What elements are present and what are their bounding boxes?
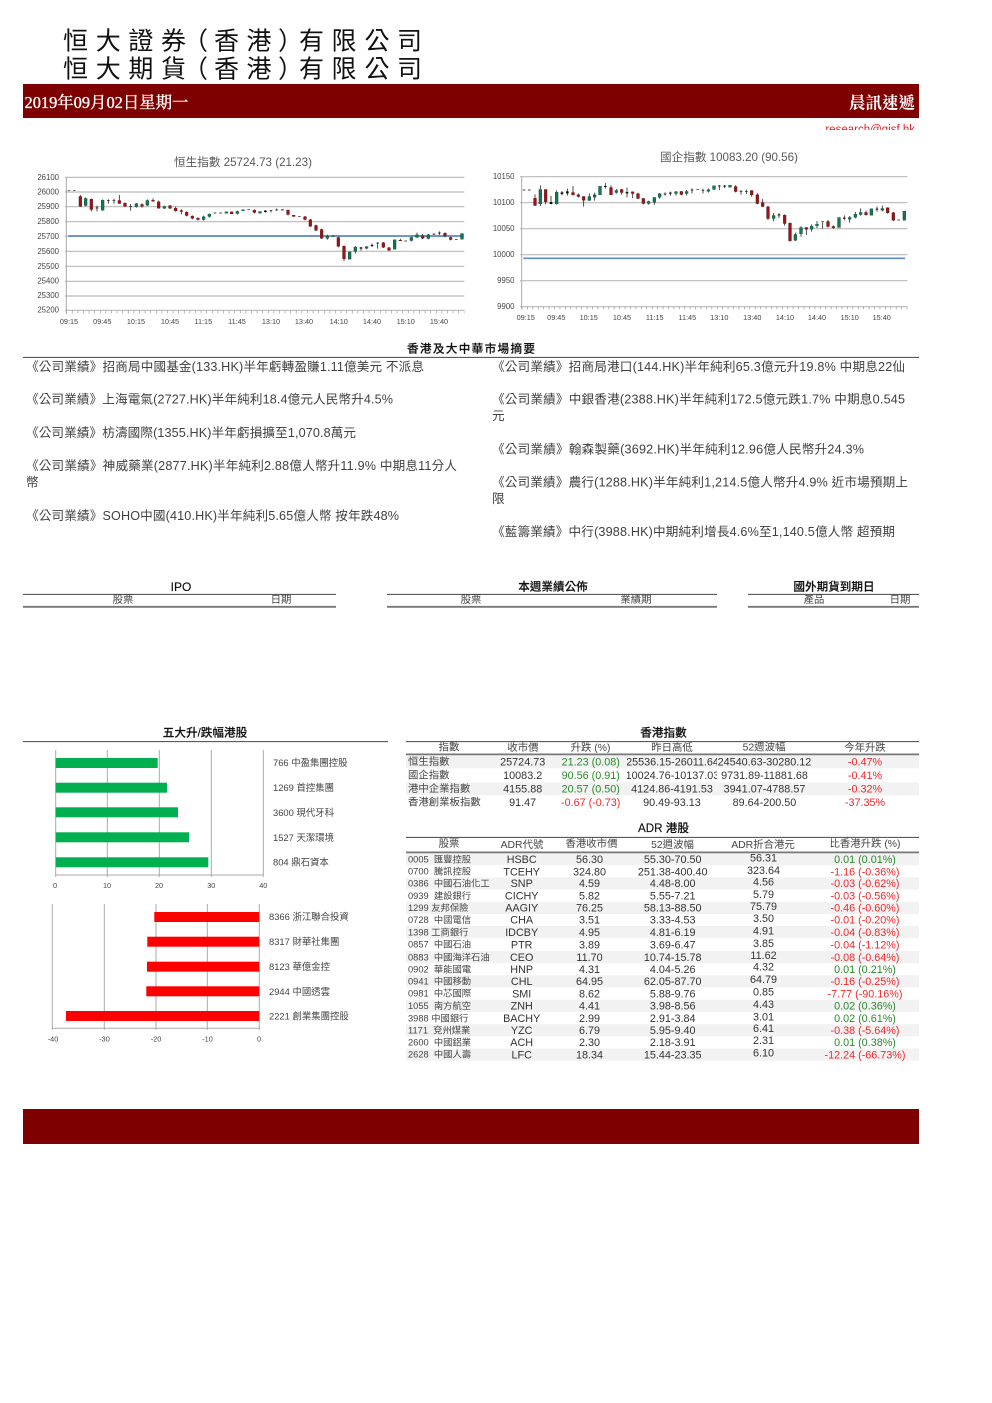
row shading [406,853,919,1061]
stock names: 1171 兗州煤業 [408,1024,470,1035]
close values: 91.47 [509,797,536,809]
news list right: 《公司業績》招商局港口(144.HK)半年純利65.3億元升19.8% 中期息22仙 [492,359,905,374]
heading: ADR 港股 [638,821,689,835]
Hong Kong close: 324.80 [573,866,606,878]
ADR codes: IDCBY [505,927,538,939]
Hong Kong close: 4.59 [579,878,600,890]
52 week range: 9731.89-11881.68 [721,770,808,782]
premium or discount to Hong Kong: -0.46 (-0.60%) [830,903,900,915]
stock names: 0700 騰訊控股 [408,866,471,877]
Hong Kong close: 3.89 [579,939,600,951]
year to date: -0.41% [848,770,882,782]
Hong Kong close: 6.79 [579,1025,600,1037]
Hong Kong close [573,854,606,1061]
bar chart: top gainers: 1269 首控集團 [273,782,334,793]
row names: 恒生指數 [408,755,450,768]
premium or discount to Hong Kong: -1.16 (-0.36%) [830,866,900,878]
stock names: 0981 中芯國際 [408,988,471,999]
x axis labels: 14:40 [808,313,826,322]
stock names: 2628 中國人壽 [408,1049,471,1060]
x axis labels: 13:40 [743,313,761,322]
news list left: 幣 [26,476,39,490]
Hong Kong close: 4.41 [579,1001,600,1013]
stock names: 2600 中國鋁業 [408,1036,471,1047]
column headers: 指數 [439,740,460,754]
52 week range [718,757,811,809]
row names: 國企指數 [408,768,450,781]
ADR codes: HNP [510,964,533,976]
ADR codes: ACH [510,1037,533,1049]
ADR value in HKD: 5.79 [753,889,774,901]
52 week range: 24540.63-30280.12 [718,757,811,769]
bar chart: top gainers: 30 [207,881,215,890]
bar chart: top gainers: 40 [259,881,267,890]
y axis labels: 25800 [37,217,60,226]
Hong Kong close: 11.70 [576,952,603,964]
news list right: 限 [492,492,505,506]
year to date: -0.47% [848,757,882,769]
stock names: 1299 友邦保險 [408,902,468,913]
premium or discount to Hong Kong: -0.38 (-5.64%) [830,1025,900,1037]
column headers [439,837,900,851]
bar chart: top losers: 2221 創業集團控股 [269,1010,349,1022]
table: IPO: IPO [171,580,191,594]
stock names: 0883 中國海洋石油 [408,951,490,962]
x axis labels: 10:45 [161,317,179,326]
52 week range: 4.81-6.19 [650,927,696,939]
y axis labels: 10150 [493,172,515,181]
x axis labels: 14:40 [363,317,381,326]
52 week range: 3.69-6.47 [650,939,696,951]
52 week range: 89.64-200.50 [733,797,796,809]
table: Hong Kong indices [406,726,919,809]
ADR value in HKD [747,852,780,1060]
ADR codes: SNP [511,878,533,890]
ADR codes: SMI [512,988,531,1000]
company title: 恒大證券（香港）有限公司 [63,28,422,56]
y axis labels: 26000 [37,188,60,196]
panel: market summary [23,342,919,539]
news list right: 元 [492,409,505,423]
52 week range: 10.74-15.78 [644,952,702,964]
y axis labels: 9950 [497,276,515,285]
column headers: 收市價 [507,741,539,754]
news list left: 《公司業績》SOHO中國(410.HK)半年純利5.65億人幣 按年跌48% [26,508,399,523]
premium or discount to Hong Kong: -0.03 (-0.56%) [830,891,900,903]
chart title: 國企指數 10083.20 (90.56) [660,150,798,164]
Hong Kong close: 8.62 [579,988,600,1000]
52 week range: 62.05-87.70 [644,976,702,988]
y axis labels: 10050 [493,224,515,233]
premium or discount to Hong Kong: -7.77 (-90.16%) [827,988,903,1000]
column headers: 股票 [439,838,459,850]
table: overseas futures expiry: 產品 [804,593,824,606]
x axis labels: 14:10 [330,317,348,326]
premium or discount to Hong Kong: 0.01 (0.21%) [834,964,896,976]
y axis labels: 25300 [37,291,60,300]
ADR value in HKD: 4.32 [753,962,774,974]
bar chart: top gainers: 0 [53,881,57,890]
stock names: 1055 南方航空 [408,1000,471,1011]
Hong Kong close: 18.34 [576,1049,603,1061]
x axis labels: 10:45 [613,313,631,322]
x axis labels: 11:15 [194,317,212,326]
x axis labels: 13:10 [262,317,280,326]
ADR codes: HSBC [507,854,537,866]
bar chart: top losers: 8123 華億金控 [269,961,330,972]
premium or discount to Hong Kong: -0.01 (-0.20%) [830,915,900,927]
day range: 90.49-93.13 [643,797,701,809]
bar chart: top losers: -10 [202,1034,213,1044]
table: weekly results: 業績期 [620,593,652,606]
52 week range: 15.44-23.35 [644,1049,702,1061]
column headers: ADR折合港元 [731,838,795,851]
ADR value in HKD: 4.56 [753,877,774,889]
Hong Kong close: 76.25 [576,903,603,915]
ADR value in HKD: 3.85 [753,938,774,950]
premium or discount to Hong Kong: -0.03 (-0.62%) [830,878,900,890]
premium or discount to Hong Kong: 0.02 (0.61%) [834,1013,896,1025]
y axis labels [493,172,515,311]
premium or discount to Hong Kong: 0.01 (0.01%) [834,854,896,866]
ADR value in HKD: 4.43 [753,999,774,1011]
company title [63,28,422,84]
day range [627,758,717,806]
ADR value in HKD: 75.79 [750,901,777,913]
ADR codes [503,854,540,1061]
x axis labels: 13:40 [295,317,313,326]
x axis labels: 15:10 [397,317,415,326]
column headers: 香港收市價 [566,837,618,850]
bar chart: top losers: 2944 中國透雲 [269,986,330,997]
Hong Kong close: 3.51 [579,915,600,927]
Hong Kong close: 2.30 [579,1037,600,1049]
x axis labels [517,313,891,322]
bar chart: top gainers: 804 鼎石資本 [273,856,329,868]
stock names: 0941 中國移動 [408,975,471,986]
ADR codes: CHL [511,976,533,988]
table: weekly results [387,580,717,607]
close values: 4155.88 [503,784,542,796]
column headers: 52週波幅 [651,838,694,851]
bar chart: top losers: -40 [48,1034,58,1044]
column headers [439,740,886,754]
ADR value in HKD: 6.41 [753,1023,774,1035]
table: overseas futures expiry [748,580,919,607]
bar chart: top gainers [53,750,348,890]
bar chart: top losers: 8317 財華社集團 [269,936,339,947]
ADR codes: PTR [511,939,533,951]
premium or discount to Hong Kong: -0.08 (-0.64%) [830,952,900,964]
x axis labels: 11:15 [646,313,664,322]
day range: 25536.15-26011.64 [626,757,719,769]
news list left: 《公司業績》招商局中國基金(133.HK)半年虧轉盈賺1.11億美元 不派息 [26,359,424,374]
row names: 香港創業板指數 [408,795,481,808]
52 week range: 3.33-4.53 [650,915,696,927]
footer banner [23,1109,919,1144]
52 week range: 3941.07-4788.57 [724,784,805,796]
premium or discount to Hong Kong: -0.04 (-0.83%) [830,927,900,939]
column headers: 升跌 (%) [571,741,610,754]
52 week range: 58.13-88.50 [644,903,702,915]
change values [561,757,620,809]
52 week range: 5.55-7.21 [650,891,696,903]
table: weekly results: 本週業績公佈 [518,580,588,594]
column headers: 52週波幅 [743,740,785,754]
day range: 4124.86-4191.53 [631,784,713,796]
column headers: 今年升跌 [844,741,886,754]
ADR codes: CICHY [505,891,538,903]
x axis labels: 10:15 [580,313,598,322]
y axis labels: 26100 [37,173,60,182]
x axis labels: 14:10 [776,313,794,322]
news list left [26,359,457,523]
column headers: 比香港升跌 (%) [830,837,900,850]
row names: 港中企業指數 [408,782,471,795]
bar chart: top gainers: 3600 現代牙科 [273,807,335,818]
table: weekly results: 股票 [461,594,481,606]
news list right: 《公司業績》翰森製藥(3692.HK)半年純利12.96億人民幣升24.3% [492,442,864,456]
report name: 晨訊速遞 [849,92,916,112]
column headers: ADR代號 [501,838,544,851]
y axis labels: 10000 [493,250,515,259]
52 week range [638,854,708,1061]
year to date [845,757,886,809]
year to date: -0.32% [848,784,882,796]
ADR value in HKD: 323.64 [747,865,780,877]
stock names: 0902 華能國電 [408,963,471,974]
premium or discount to Hong Kong: -12.24 (-66.73%) [824,1049,906,1061]
table: ADR stocks [406,821,919,1061]
ADR value in HKD: 6.10 [753,1048,774,1060]
x axis labels: 15:40 [873,313,891,322]
premium or discount to Hong Kong: -0.04 (-1.12%) [830,939,900,951]
chart title: 恒生指數 25724.73 (21.23) [174,155,312,169]
bar chart: top losers: -20 [151,1034,161,1044]
day range: 10024.76-10137.03 [626,770,719,782]
year to date: -37.35% [845,797,886,809]
bar chart: top gainers: 766 中盈集團控股 [273,757,348,768]
x axis labels: 09:45 [93,317,111,326]
ADR value in HKD: 2.31 [753,1035,774,1047]
ADR codes: LFC [511,1049,532,1061]
x axis labels: 11:45 [678,313,696,322]
ADR value in HKD: 11.62 [750,950,777,962]
close values: 10083.2 [503,770,542,782]
Hong Kong close: 4.31 [579,964,600,976]
company title: 恒大期貨（香港）有限公司 [63,56,422,84]
bar chart: top losers: 8366 浙江聯合投資 [269,911,349,922]
table: IPO: 日期 [271,594,291,606]
premium or discount to Hong Kong: 0.02 (0.36%) [834,1001,896,1013]
52 week range: 2.18-3.91 [650,1037,696,1049]
x axis labels: 15:10 [841,313,859,322]
y axis labels: 25400 [37,276,60,286]
Hong Kong close: 2.99 [579,1013,600,1025]
ADR value in HKD: 4.91 [753,926,774,938]
stock names: 0728 中國電信 [408,914,471,925]
news list left: 《公司業績》上海電氣(2727.HK)半年純利18.4億元人民幣升4.5% [26,392,393,406]
premium or discount to Hong Kong [824,854,906,1061]
ADR codes: AAGIY [505,903,538,915]
close values [500,757,545,809]
table: IPO [23,580,336,607]
x axis labels: 09:15 [517,313,535,322]
bar chart: top gainers: 1527 天潔環境 [273,832,334,843]
stock names: 0939 建設銀行 [408,890,471,901]
contact email clipped: research@gisf.hk [825,124,915,136]
news list left: 《公司業績》枋濤國際(1355.HK)半年虧損擴至1,070.8萬元 [26,425,356,440]
y axis labels: 9900 [497,302,515,311]
heading: 香港及大中華市場摘要 [407,342,535,356]
ADR codes: TCEHY [503,866,540,878]
52 week range: 55.30-70.50 [644,854,702,866]
chart: H-share Index candlesticks [493,150,907,322]
column headers: 昨日高低 [651,741,693,754]
Hong Kong close: 56.30 [576,854,603,866]
x axis labels: 09:15 [60,317,78,326]
ADR codes: YZC [511,1025,533,1037]
news list right: 《藍籌業績》中行(3988.HK)中期純利增長4.6%至1,140.5億人幣 超預期 [492,525,895,539]
news list right [492,359,908,539]
change values: 20.57 (0.50) [562,784,620,796]
bar chart: top gainers: 10 [103,881,111,890]
ADR value in HKD: 64.79 [750,974,777,986]
52 week range: 4.04-5.26 [650,964,696,976]
x axis labels [60,317,448,326]
52 week range: 251.38-400.40 [638,866,708,878]
52 week range: 2.91-3.84 [650,1013,696,1025]
ADR codes: CEO [510,952,533,964]
heading: 香港指數 [640,726,687,740]
change values: 21.23 (0.08) [562,757,620,769]
bar chart: top losers [48,904,349,1044]
52 week range: 5.95-9.40 [650,1025,696,1037]
y axis labels: 25900 [37,202,60,211]
y axis labels: 25200 [37,306,60,314]
stock names: 3988 中國銀行 [408,1012,468,1023]
ADR value in HKD: 56.31 [750,852,777,864]
x axis labels: 10:15 [127,317,145,326]
bar chart: top losers: -30 [99,1034,110,1044]
ADR value in HKD: 3.50 [753,913,774,925]
change values: 90.56 (0.91) [562,770,620,782]
x axis labels: 09:45 [547,313,565,322]
ADR value in HKD: 3.01 [753,1012,774,1024]
52 week range: 5.88-9.76 [650,988,696,1000]
ADR codes: CHA [510,915,534,927]
premium or discount to Hong Kong: -0.16 (-0.25%) [830,976,900,988]
row names [408,755,481,808]
news list left: 《公司業績》神威藥業(2877.HK)半年純利2.88億人幣升11.9% 中期息11分人 [26,458,457,473]
bar chart: top gainers: 20 [155,881,163,890]
premium or discount to Hong Kong: 0.01 (0.38%) [834,1037,896,1049]
change values: -0.67 (-0.73) [561,797,620,809]
y axis labels: 25600 [37,247,60,256]
news list right: 《公司業績》農行(1288.HK)半年純利1,214.5億人幣升4.9% 近市場預期上 [492,474,908,490]
stock names [408,853,490,1060]
y axis labels [37,173,60,314]
date: 2019年09月02日星期一 [24,93,188,112]
chart: Hang Seng Index candlesticks [37,155,464,326]
table: overseas futures expiry: 國外期貨到期日 [793,580,875,594]
ADR codes: ZNH [511,1001,533,1013]
stock names: 1398 工商銀行 [408,926,468,937]
52 week range: 4.48-8.00 [650,878,696,890]
bar chart: top losers: 0 [257,1034,261,1044]
x axis labels: 15:40 [430,317,448,326]
stock names: 0857 中國石油 [408,939,471,950]
table: IPO: 股票 [113,594,133,606]
y axis labels: 25700 [37,232,60,241]
header banner [23,84,919,118]
panel: top movers [23,726,388,1044]
stock names: 0386 中國石油化工 [408,878,490,888]
stock names: 0005 匯豐控股 [408,853,471,864]
ADR value in HKD: 0.85 [753,987,774,999]
heading: 五大升/跌幅港股 [163,726,248,740]
y axis labels: 10100 [493,198,515,207]
Hong Kong close: 4.95 [579,927,600,939]
table: overseas futures expiry: 日期 [890,594,910,606]
ADR codes: BACHY [503,1013,540,1025]
close values: 25724.73 [500,757,545,769]
x axis labels: 13:10 [710,313,728,322]
Hong Kong close: 64.95 [576,976,603,988]
x axis labels: 11:45 [228,317,246,326]
y axis labels: 25500 [37,262,60,271]
news list right: 《公司業績》中銀香港(2388.HK)半年純利172.5億元跌1.7% 中期息0.545 [492,392,905,406]
Hong Kong close: 5.82 [579,891,600,903]
52 week range: 3.98-8.56 [650,1001,696,1013]
